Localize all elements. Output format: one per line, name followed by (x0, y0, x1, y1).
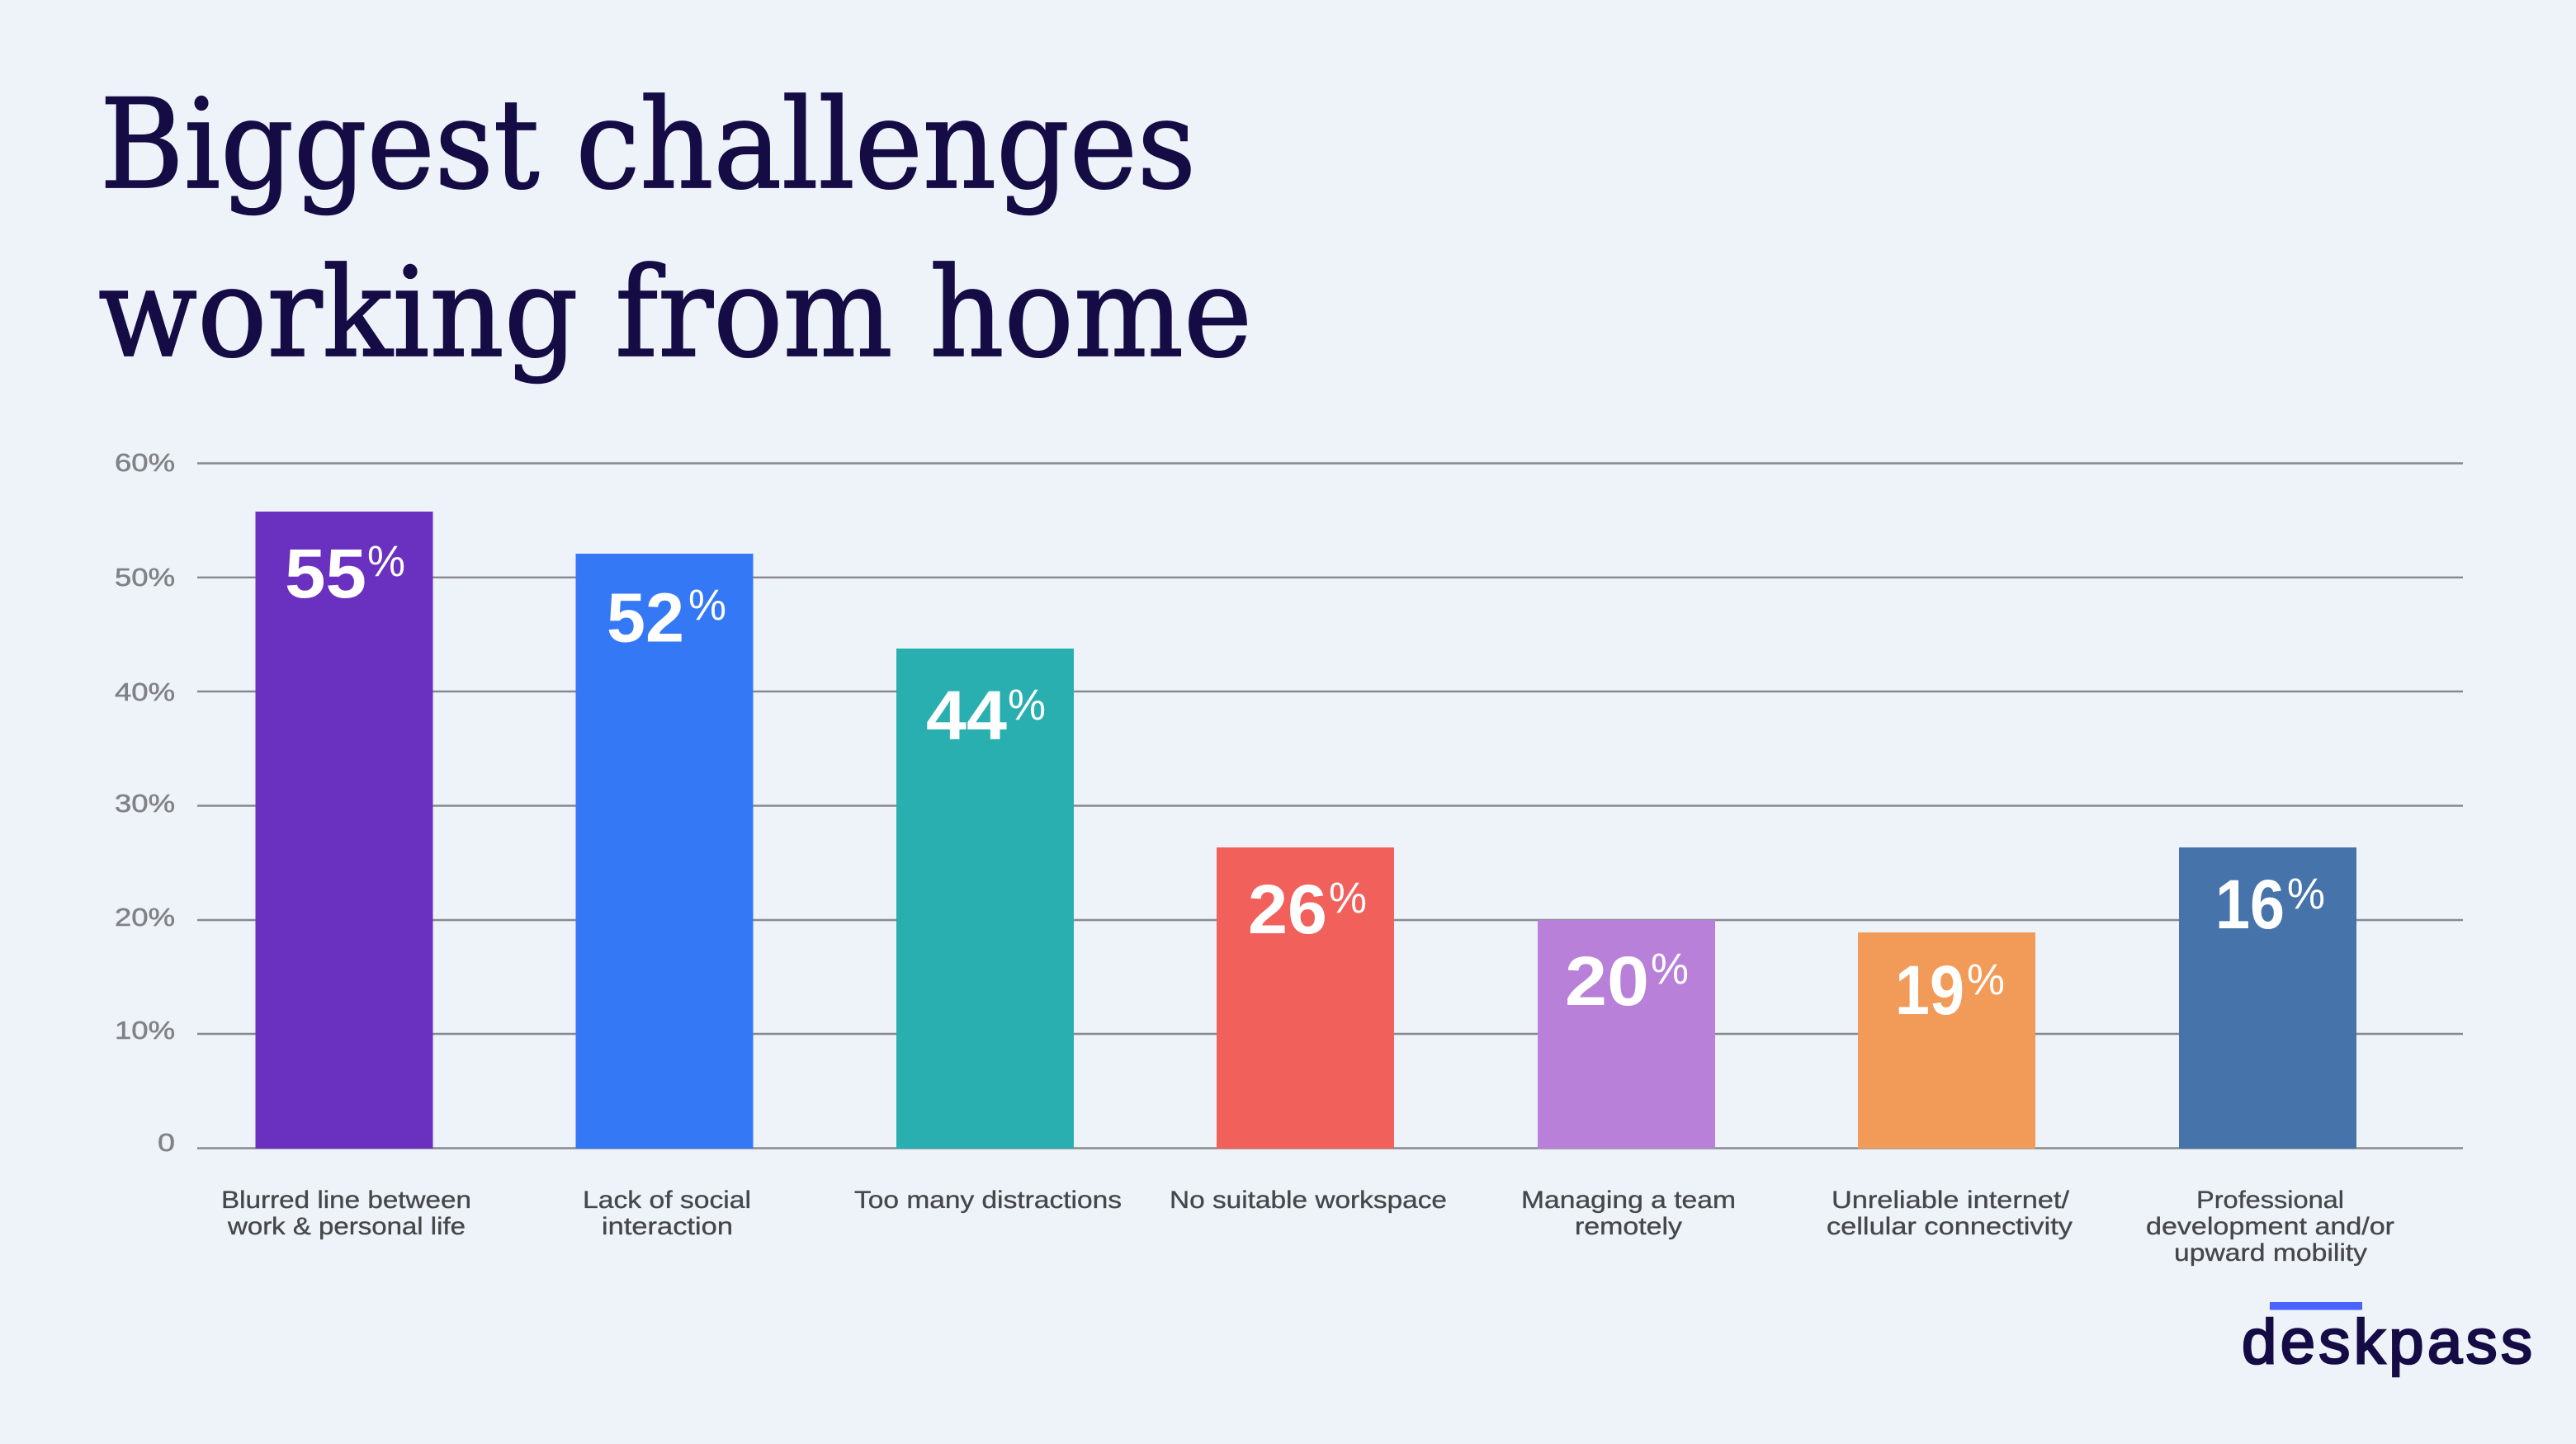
bar: professional development 16%: 16 (2215, 866, 2285, 943)
category labels: work & personal life (227, 1213, 466, 1240)
bar: social interaction 52% (576, 554, 753, 1149)
category labels: interaction (602, 1213, 733, 1240)
bar: managing a team 20% (1538, 920, 1715, 1149)
title: working from home (98, 242, 1252, 385)
bar: managing a team 20%: % (1651, 945, 1689, 993)
bar: workspace 26%: 26 (1248, 871, 1327, 948)
y axis labels: 0 (158, 1128, 175, 1157)
bar: distractions 44%: 44 (926, 677, 1007, 754)
y axis labels: 50% (115, 563, 175, 592)
category labels: Too many distractions (854, 1187, 1122, 1214)
bar: social interaction 52%: % (688, 581, 726, 630)
category labels: Unreliable internet/ (1832, 1187, 2070, 1214)
bar: distractions 44%: % (1008, 681, 1046, 729)
y axis labels: 30% (115, 789, 175, 818)
y axis labels (115, 448, 175, 1157)
bar: managing a team 20%: 20 (1565, 942, 1649, 1020)
bar: workspace 26% (1217, 847, 1394, 1149)
category labels: Blurred line between (221, 1187, 471, 1214)
bar: blurred line 55%: 55 (285, 535, 366, 612)
y axis labels: 40% (115, 677, 175, 706)
bar: workspace 26%: % (1329, 874, 1367, 923)
y axis labels: 10% (115, 1016, 175, 1045)
category labels (221, 1187, 2394, 1267)
bar: distractions 44% (896, 649, 1074, 1149)
bar: blurred line 55%: % (367, 537, 405, 586)
y axis labels: 20% (115, 903, 175, 932)
category labels: cellular connectivity (1827, 1213, 2073, 1240)
category labels: Professional (2196, 1187, 2344, 1214)
category labels: No suitable workspace (1170, 1187, 1447, 1214)
category labels: development and/or (2146, 1213, 2394, 1240)
category labels: Managing a team (1521, 1187, 1736, 1214)
category labels: remotely (1575, 1213, 1682, 1240)
title (98, 73, 1252, 385)
bar: professional development 16% (2179, 847, 2356, 1149)
logo: deskpass: deskpass (2242, 1307, 2532, 1377)
title: Biggest challenges (100, 73, 1196, 217)
bar: internet 19%: % (1967, 956, 2005, 1004)
bar: professional development 16%: % (2287, 870, 2325, 918)
bar chart (115, 448, 2463, 1157)
bar: social interaction 52%: 52 (607, 579, 684, 657)
category labels: Lack of social (583, 1187, 751, 1214)
bar: internet 19%: 19 (1895, 951, 1964, 1029)
bar: blurred line 55% (256, 512, 432, 1149)
y axis labels: 60% (115, 448, 175, 477)
category labels: upward mobility (2174, 1239, 2367, 1267)
bar: internet 19% (1858, 932, 2035, 1149)
